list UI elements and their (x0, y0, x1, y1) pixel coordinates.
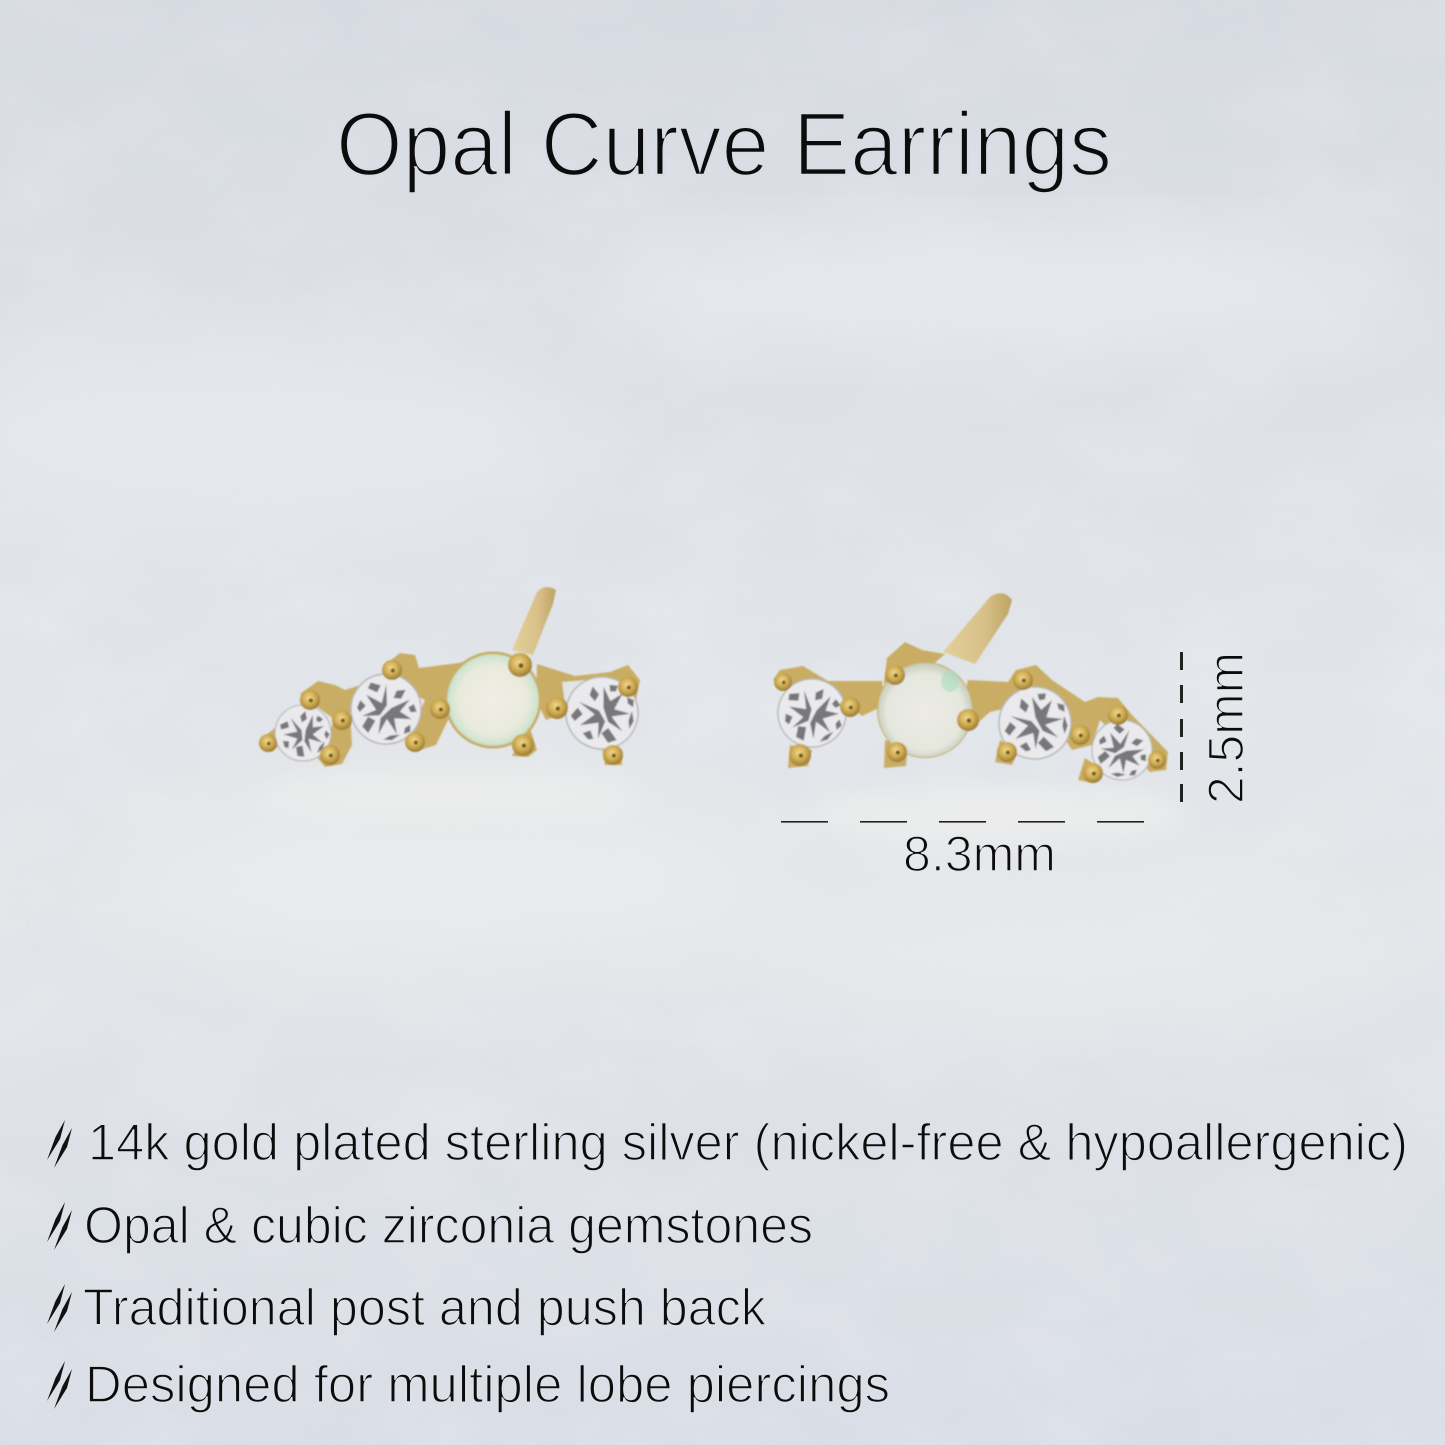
feature list (47, 1114, 1408, 1414)
earring: right (768, 593, 1168, 791)
bullet: post and push back: Traditional post and push back (83, 1279, 767, 1337)
prongs (774, 665, 1166, 783)
icon: double slash (47, 1284, 72, 1332)
gold setting (773, 642, 1168, 783)
bullet: gemstones: Opal & cubic zirconia gemstones (84, 1197, 813, 1255)
earring: left (259, 587, 650, 767)
post (943, 593, 1012, 664)
opal stone (878, 663, 972, 757)
width dimension line (781, 821, 1144, 823)
width label: 8.3mm (903, 826, 1056, 882)
cubic zirconia stones (275, 705, 331, 761)
title: Opal Curve Earrings (336, 95, 1112, 195)
opal stone (447, 654, 539, 746)
icon: double slash (47, 1202, 72, 1250)
post (512, 587, 556, 655)
gold setting (262, 652, 640, 767)
height dimension line (1180, 652, 1183, 802)
bullet: gold plated: 14k gold plated sterling silver (nickel-free & hypoallergenic) (88, 1114, 1408, 1172)
prongs (259, 653, 638, 765)
height label: 2.5mm (1198, 652, 1254, 804)
cubic zirconia stones (768, 669, 856, 757)
icon: double slash (47, 1361, 72, 1409)
icon: double slash (47, 1120, 72, 1168)
bullet: multiple piercings: Designed for multiple lobe piercings (85, 1356, 890, 1414)
